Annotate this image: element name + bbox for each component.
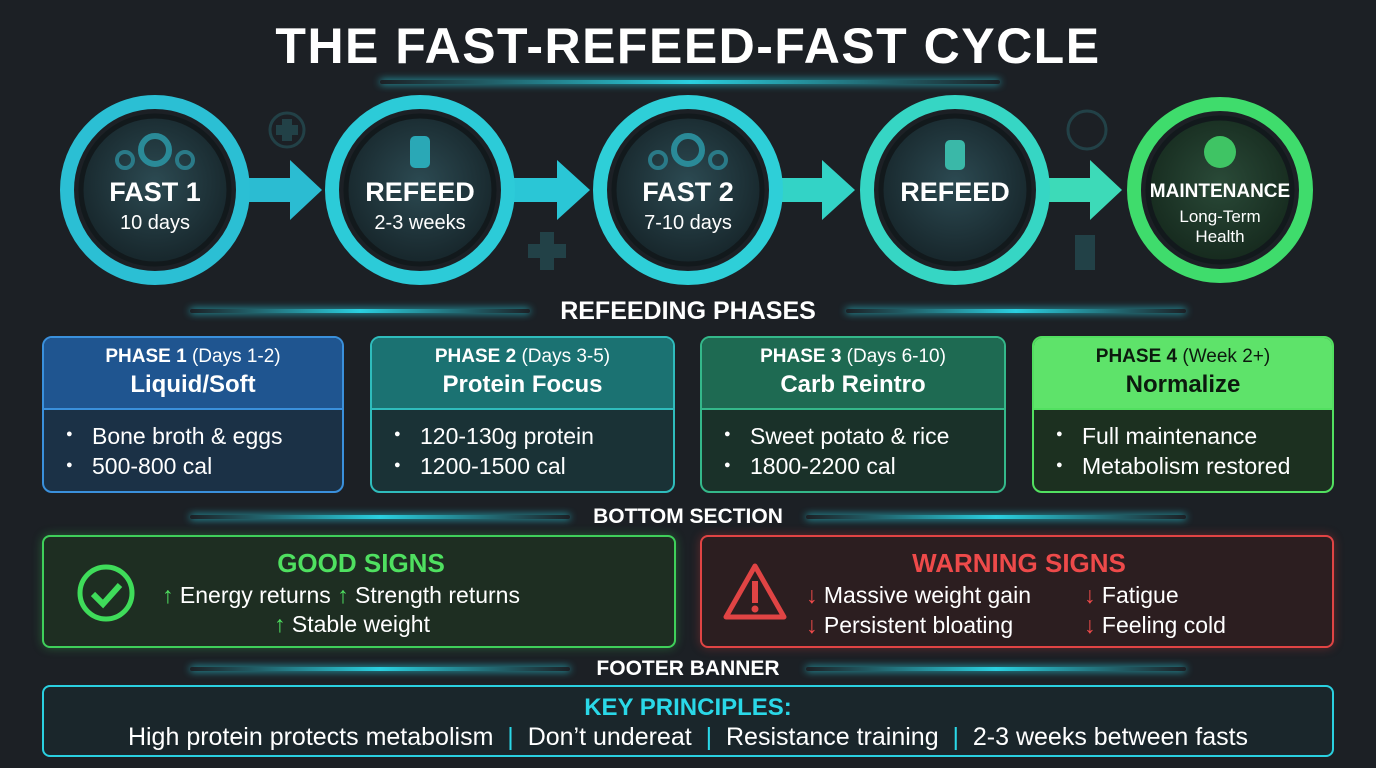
section heading: bottom section: BOTTOM SECTION [593,505,783,528]
panel: phase 3: Carb Reintro [780,371,926,398]
circle: maintenance [1134,104,1306,276]
panel: phase 1 [42,336,344,493]
panel: phase 2: 120-130g protein [420,423,594,449]
circle: fast 2: 7-10 days [644,212,732,234]
panel: warning signs: WARNING SIGNS [912,548,1126,578]
panel: good signs: ↑ Stable weight [274,611,430,637]
circle: maintenance: Health [1195,227,1245,246]
panel: phase 4: Normalize [1126,371,1240,398]
panel: warning signs: ↓ Fatigue [1084,582,1179,608]
panel: good signs: GOOD SIGNS [277,548,445,578]
panel: good signs: ↑ Energy returns ↑ Strength returns [162,582,520,608]
panel: phase 1: Liquid/Soft [130,371,256,398]
panel: phase 2: Protein Focus [442,371,603,398]
cycle diagram [60,95,1313,285]
footer: key principles: High protein protects metabolism | Don’t undereat | Resistance training | 2-3 weeks between fasts [128,723,1248,751]
panel: phase 1: 500-800 cal [92,453,212,479]
panel: phase 3: 1800-2200 cal [750,453,896,479]
panel: phase 3: Sweet potato & rice [750,423,949,449]
panel: phase 2 [370,336,675,493]
panel: warning signs: ↓ Massive weight gain [806,582,1031,608]
section heading: footer banner: FOOTER BANNER [596,657,780,680]
panel: warning signs: ↓ Persistent bloating [806,612,1013,638]
circle: refeed 1: 2-3 weeks [374,212,466,234]
circle: refeed 2 [867,102,1043,278]
circle: refeed 1 [332,102,508,278]
section heading: refeeding phases: REFEEDING PHASES [560,297,816,325]
circle: fast 2: FAST 2 [642,177,734,207]
panel: phase 1: Bone broth & eggs [92,423,283,449]
circle: fast 2 [600,102,776,278]
panel: phase 3: PHASE 3 (Days 6-10) [760,346,946,367]
circle: refeed 2: REFEED [900,177,1010,207]
icon: warning [724,564,786,620]
panel: phase 3 [700,336,1006,493]
panel: good signs [42,535,676,648]
panel: phase 2: 1200-1500 cal [420,453,566,479]
title: THE FAST-REFEED-FAST CYCLE [275,18,1101,74]
icon: check [78,564,134,622]
panel: phase 4 [1032,336,1334,493]
panel: phase 4: Metabolism restored [1082,453,1290,479]
footer: key principles: KEY PRINCIPLES: [584,694,792,721]
circle: maintenance: MAINTENANCE [1150,181,1290,202]
panel: phase 2: PHASE 2 (Days 3-5) [435,346,610,367]
circle: maintenance: Long-Term [1179,207,1261,226]
panel: phase 4: Full maintenance [1082,423,1257,449]
arrows [245,160,322,220]
circle: fast 1: 10 days [120,212,190,234]
footer: key principles [42,685,1334,757]
panel: warning signs [700,535,1334,648]
panel: phase 1: PHASE 1 (Days 1-2) [105,346,281,367]
panel: phase 4: PHASE 4 (Week 2+) [1096,346,1270,367]
circle: refeed 1: REFEED [365,177,475,207]
circle: fast 1: FAST 1 [109,177,201,207]
circle: fast 1 [67,102,243,278]
panel: warning signs: ↓ Feeling cold [1084,612,1226,638]
